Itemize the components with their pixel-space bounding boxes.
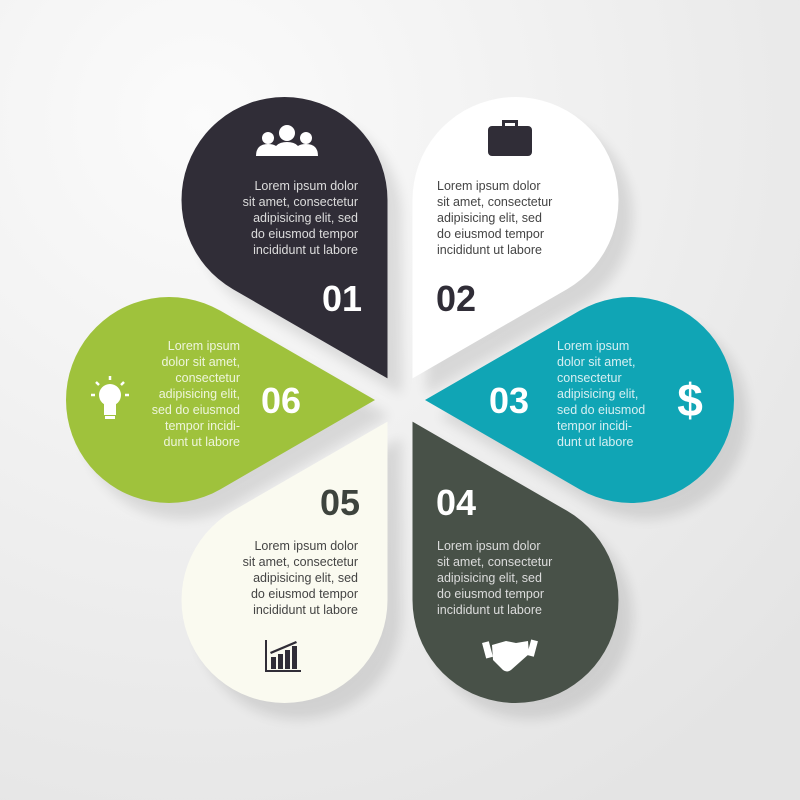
text 05: do eiusmod tempor [251,587,358,601]
text 05: adipisicing elit, sed [253,571,358,585]
petal 06 [66,297,375,503]
text 04: do eiusmod tempor [437,587,544,601]
text 04: incididunt ut labore [437,603,542,617]
text 06: consectetur [175,371,240,385]
text 03: consectetur [557,371,622,385]
text 04: sit amet, consectetur [437,555,552,569]
icon: chart [265,640,301,672]
number 04: 04 [436,482,476,523]
petal 03 [425,297,734,503]
petal 01 [144,59,477,430]
text 05: Lorem ipsum dolor [254,539,358,553]
icon: people [256,125,318,156]
number 06: 06 [261,380,301,421]
petal 02 [323,59,656,430]
text 03: sed do eiusmod [557,403,645,417]
text 06: dunt ut labore [164,435,240,449]
icon: briefcase [488,120,532,156]
icon: handshake [482,639,538,672]
number 02: 02 [436,278,476,319]
text 05: sit amet, consectetur [243,555,358,569]
text 06: sed do eiusmod [152,403,240,417]
text 06: dolor sit amet, [161,355,240,369]
shadows [80,75,748,757]
text 04: adipisicing elit, sed [437,571,542,585]
text 01: sit amet, consectetur [243,195,358,209]
number 05: 05 [320,482,360,523]
text 02: sit amet, consectetur [437,195,552,209]
text 05: incididunt ut labore [253,603,358,617]
text 03: tempor incidi- [557,419,632,433]
petal 05 [144,370,477,741]
text 02: do eiusmod tempor [437,227,544,241]
text 03: adipisicing elit, [557,387,638,401]
text 03: dolor sit amet, [557,355,636,369]
text 06: tempor incidi- [165,419,240,433]
icon: bulb [91,376,129,419]
number 03: 03 [489,380,529,421]
text 01: Lorem ipsum dolor [254,179,358,193]
text 02: adipisicing elit, sed [437,211,542,225]
text 06: adipisicing elit, [159,387,240,401]
text 03: Lorem ipsum [557,339,629,353]
text 01: adipisicing elit, sed [253,211,358,225]
text 04: Lorem ipsum dolor [437,539,541,553]
number 01: 01 [322,278,362,319]
text 06: Lorem ipsum [168,339,240,353]
petal 04 [323,370,656,741]
text 01: do eiusmod tempor [251,227,358,241]
icon: dollar: $ [677,374,703,426]
text 01: incididunt ut labore [253,243,358,257]
text 02: Lorem ipsum dolor [437,179,541,193]
text 03: dunt ut labore [557,435,633,449]
text 02: incididunt ut labore [437,243,542,257]
